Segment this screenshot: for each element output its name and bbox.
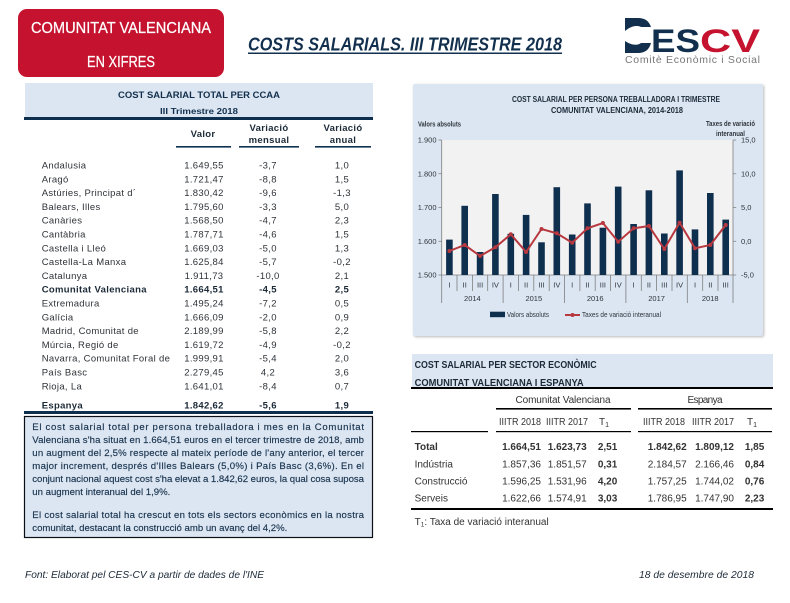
date: 18 de desembre de 2018 <box>639 569 754 581</box>
year labels: 2016 <box>587 294 604 303</box>
text box: summary commentary: El cost salarial total ha crescut en tots els sectors econòmics en la nostra <box>32 510 365 521</box>
table rows: -10,0 <box>256 271 280 282</box>
table rows: -4,7 <box>259 216 277 227</box>
table rows: 3,03 <box>598 493 618 504</box>
logo: CES CV: Comitè Econòmic i Social <box>625 54 760 66</box>
right axis labels: 15,0 <box>741 136 756 144</box>
panel: cost salarial per sector econòmic table <box>411 354 773 528</box>
table heading: III Trimestre 2018 <box>160 106 238 116</box>
column headers <box>176 123 371 148</box>
text box: summary commentary <box>24 416 372 538</box>
quarter labels: II <box>585 280 590 290</box>
table rows: 1.842,62 <box>184 400 224 412</box>
table rows: 1.625,84 <box>184 257 224 268</box>
column headers: Comunitat Valenciana <box>516 395 611 406</box>
table rows: Astúries, Principat d´ <box>42 188 136 199</box>
table footnote: 1 <box>421 522 425 528</box>
table rows: 1.744,02 <box>695 476 734 487</box>
quarter labels: IV <box>676 280 683 290</box>
table rows: Navarra, Comunitat Foral de <box>42 354 170 365</box>
table heading <box>24 83 373 120</box>
column headers: T <box>599 417 605 428</box>
table rows: 1.495,24 <box>184 298 224 310</box>
table rows: 2.279,45 <box>184 368 224 378</box>
table rows: Total <box>415 442 438 453</box>
table rows: 1.574,91 <box>548 493 587 504</box>
chart legend <box>490 310 661 319</box>
column headers: Variació <box>323 123 363 134</box>
table rows: 1,0 <box>335 160 349 172</box>
table rows: -5,7 <box>259 257 277 268</box>
table rows: -4,6 <box>259 230 277 240</box>
year labels: 2014 <box>464 294 481 303</box>
table rows: 2.166,46 <box>695 459 734 470</box>
logo: CES CV: CV <box>700 23 761 59</box>
chart legend: Taxes de variació interanual <box>582 310 661 319</box>
table rows: 1.669,03 <box>184 243 224 254</box>
table rows: 1.786,95 <box>648 493 687 504</box>
table rows: -2,0 <box>259 312 277 323</box>
table rows: Andalusia <box>42 160 87 172</box>
table rows: -4,9 <box>259 340 277 351</box>
quarter labels: I <box>510 280 512 290</box>
chart legend: Valors absoluts <box>507 310 549 319</box>
quarter labels: IV <box>615 280 622 290</box>
chart title: COST SALARIAL PER PERSONA TREBALLADORA I TRIMESTRE <box>512 95 721 104</box>
table rows: Catalunya <box>42 271 88 282</box>
right axis labels: -5,0 <box>741 270 754 280</box>
table rows: Indústria <box>415 459 453 470</box>
table rows: 1.795,60 <box>184 202 224 213</box>
right axis labels: 0,0 <box>741 237 751 246</box>
table rows: -3,3 <box>259 202 277 213</box>
table rows: 0,7 <box>335 381 349 392</box>
line: taxes de variació interanual <box>447 221 728 258</box>
column headers: IIITR 2018 <box>499 417 541 428</box>
table rows <box>411 442 773 510</box>
quarter labels: III <box>477 280 483 290</box>
quarter labels: III <box>661 280 667 290</box>
table rows: 0,76 <box>745 476 765 487</box>
text box: summary commentary: conjunt nacional aquest cost s'ha elevat a 1.842,62 euros, la qual cosa suposa <box>32 474 365 485</box>
left axis labels <box>418 136 436 280</box>
table rows: 1.666,09 <box>184 312 224 323</box>
table rows: 1.787,71 <box>184 230 224 240</box>
text box: summary commentary: major increment, després d'Illes Balears (5,0%) i País Basc (3,6%). En el <box>32 461 364 472</box>
table rows: -9,6 <box>259 188 277 199</box>
quarter labels: IV <box>553 280 560 290</box>
logo: CES CV: ES <box>651 23 700 59</box>
table rows: 0,31 <box>598 459 618 470</box>
column headers: 1 <box>605 422 609 429</box>
table rows: Construcció <box>415 476 468 487</box>
table rows: Aragó <box>42 174 69 185</box>
table rows <box>24 160 373 414</box>
table rows: -1,3 <box>333 188 351 199</box>
table rows: 2,0 <box>335 354 349 365</box>
chart title: COMUNITAT VALENCIANA, 2014-2018 <box>551 106 683 115</box>
table rows: 1,9 <box>335 400 349 412</box>
table rows: 5,0 <box>335 202 349 213</box>
source note: Font: Elaborat pel CES-CV a partir de dades de l'INE <box>25 569 265 581</box>
table rows: Extremadura <box>42 298 100 310</box>
table rows: 2,1 <box>335 271 349 282</box>
table rows: Múrcia, Regió de <box>42 340 119 351</box>
column headers: Valor <box>191 129 215 140</box>
column headers: Espanya <box>688 395 723 406</box>
table rows: 1.649,55 <box>184 160 224 172</box>
left axis labels: 1.900 <box>418 136 436 144</box>
year labels: 2018 <box>702 294 719 303</box>
axes and ticks <box>438 140 736 303</box>
table rows: Madrid, Comunitat de <box>42 326 139 337</box>
table rows: 2.184,57 <box>648 459 687 470</box>
table rows: 2,5 <box>335 285 349 296</box>
axis titles <box>418 119 755 138</box>
axis titles: Valors absoluts <box>418 120 461 128</box>
table rows: 1,5 <box>335 230 349 240</box>
column headers: Variació <box>249 123 289 134</box>
text box: summary commentary: un augment interanual del 1,9%. <box>32 487 170 498</box>
table rows: Espanya <box>42 400 83 412</box>
table rows: 1.568,50 <box>184 216 224 227</box>
table rows: -0,2 <box>333 257 351 268</box>
chart title <box>512 95 721 115</box>
red badge: Comunitat Valenciana en xifres: EN XIFRES <box>87 54 155 71</box>
column headers: IIITR 2018 <box>643 417 685 428</box>
quarter labels: I <box>448 280 450 290</box>
left axis labels: 1.500 <box>418 270 436 280</box>
panel: chart cost salarial per persona treballadora <box>413 84 763 336</box>
table rows: 2,3 <box>335 216 349 227</box>
plot area <box>442 140 733 275</box>
table rows: 1.857,36 <box>502 459 541 470</box>
table heading: COST SALARIAL PER SECTOR ECONÒMIC <box>415 358 597 371</box>
quarter labels: II <box>524 280 528 290</box>
table heading: COMUNITAT VALENCIANA I ESPANYA <box>415 378 584 389</box>
red badge: Comunitat Valenciana en xifres: COMUNITAT VALENCIANA <box>31 20 212 37</box>
year labels <box>464 294 719 303</box>
table rows: 1.531,96 <box>548 476 587 487</box>
quarter labels: II <box>708 280 712 290</box>
table rows: 1.911,73 <box>185 271 223 282</box>
table rows: 0,5 <box>335 298 349 310</box>
table rows: Cantàbria <box>42 230 86 240</box>
column headers: 1 <box>753 422 757 429</box>
table rows: 1.809,12 <box>695 442 734 453</box>
table rows: 1.623,73 <box>548 442 587 453</box>
left axis labels: 1.600 <box>418 237 436 246</box>
table rows: 1.747,90 <box>695 493 734 504</box>
table rows: 1.664,51 <box>184 285 224 296</box>
right axis labels: 5,0 <box>741 203 751 212</box>
table rows: -8,4 <box>259 381 277 392</box>
table rows: 1.757,25 <box>648 476 687 487</box>
quarter labels: I <box>694 280 696 290</box>
table rows: Rioja, La <box>42 381 82 392</box>
table rows: -5,8 <box>259 326 277 337</box>
table rows: 1.622,66 <box>502 493 541 504</box>
table rows: 1.999,91 <box>184 354 224 365</box>
table footnote: T <box>415 517 421 528</box>
table footnote: : Taxa de variació interanual <box>424 517 549 528</box>
logo: CES CV <box>625 18 761 66</box>
table rows: -3,7 <box>259 160 277 172</box>
text box: summary commentary: Valenciana s'ha situat en 1.664,51 euros en el tercer trimestre de 2018, amb <box>32 435 364 446</box>
table rows: 1,5 <box>335 174 349 185</box>
quarter labels: I <box>633 280 635 290</box>
text box: summary commentary: un augment del 2,5% respecte al mateix període de l'any anterior, el tercer <box>32 448 365 459</box>
table rows: 1.830,42 <box>184 188 224 199</box>
table rows: Comunitat Valenciana <box>42 285 147 296</box>
red badge: Comunitat Valenciana en xifres <box>18 9 224 77</box>
table rows: 1.842,62 <box>648 442 687 453</box>
panel: cost salarial total per CCAA table <box>24 83 373 414</box>
quarter labels: II <box>463 280 467 290</box>
table rows: Galícia <box>42 312 74 323</box>
table rows: 3,6 <box>335 368 349 378</box>
text box: summary commentary: El cost salarial total per persona treballadora i mes en la Comunitat <box>32 422 364 433</box>
table rows: 4,20 <box>598 476 618 487</box>
table rows: -8,8 <box>259 174 277 185</box>
quarter labels: III <box>600 280 606 290</box>
table rows: -5,0 <box>259 243 277 254</box>
table rows: 1.641,01 <box>184 381 224 392</box>
column headers: anual <box>330 135 356 146</box>
table rows: Castella i Lleó <box>42 243 106 254</box>
quarter labels <box>448 280 729 290</box>
table rows: 2,2 <box>335 326 349 337</box>
column headers: IIITR 2017 <box>692 417 734 428</box>
quarter labels: III <box>723 280 729 290</box>
table rows: 1,85 <box>745 442 765 453</box>
bars: valors absoluts <box>446 170 729 275</box>
right axis labels <box>741 136 756 280</box>
table rows: 2,51 <box>598 442 618 453</box>
left axis labels: 1.800 <box>418 169 436 178</box>
column headers: mensual <box>249 135 289 146</box>
column headers: IIITR 2017 <box>546 417 588 428</box>
table rows: -5,6 <box>259 400 277 412</box>
table rows: Serveis <box>415 493 448 504</box>
quarter labels: II <box>647 280 651 290</box>
table heading: COST SALARIAL TOTAL PER CCAA <box>118 90 280 101</box>
table rows: Castella-La Manxa <box>42 257 127 268</box>
axis titles: interanual <box>716 129 745 138</box>
table rows: Canàries <box>42 216 82 227</box>
table rows: 1.851,57 <box>548 459 587 470</box>
column headers <box>411 395 772 432</box>
table rows: 4,2 <box>261 368 275 378</box>
table heading <box>411 354 773 389</box>
table rows: 2,23 <box>745 493 765 504</box>
left axis labels: 1.700 <box>418 203 436 212</box>
title: COSTS SALARIALS. III TRIMESTRE 2018 <box>248 34 562 54</box>
table rows: 1,3 <box>335 243 349 254</box>
table rows: 1.619,72 <box>184 340 224 351</box>
table rows: País Basc <box>42 368 87 378</box>
axis titles: Taxes de variació <box>706 119 755 128</box>
table rows: -5,4 <box>259 354 277 365</box>
table rows: 1.596,25 <box>502 476 541 487</box>
right axis labels: 10,0 <box>741 169 756 178</box>
quarter labels: III <box>538 280 545 290</box>
table rows: 1.664,51 <box>502 442 541 453</box>
table rows: Balears, Illes <box>42 202 101 213</box>
table rows: 0,9 <box>335 312 349 323</box>
table rows: 0,84 <box>745 459 765 470</box>
column headers: T <box>747 417 753 428</box>
table rows: 1.721,47 <box>184 174 224 185</box>
table rows: 2.189,99 <box>184 326 224 337</box>
quarter labels: I <box>571 280 573 290</box>
quarter labels: IV <box>492 280 499 290</box>
table rows: -7,2 <box>259 298 277 310</box>
table rows: -4,5 <box>259 285 277 296</box>
year labels: 2017 <box>648 294 665 303</box>
table rows: -0,2 <box>333 340 351 351</box>
year labels: 2015 <box>525 294 542 303</box>
text box: summary commentary: comunitat, destacant la construcció amb un avanç del 4,2%. <box>32 523 287 534</box>
